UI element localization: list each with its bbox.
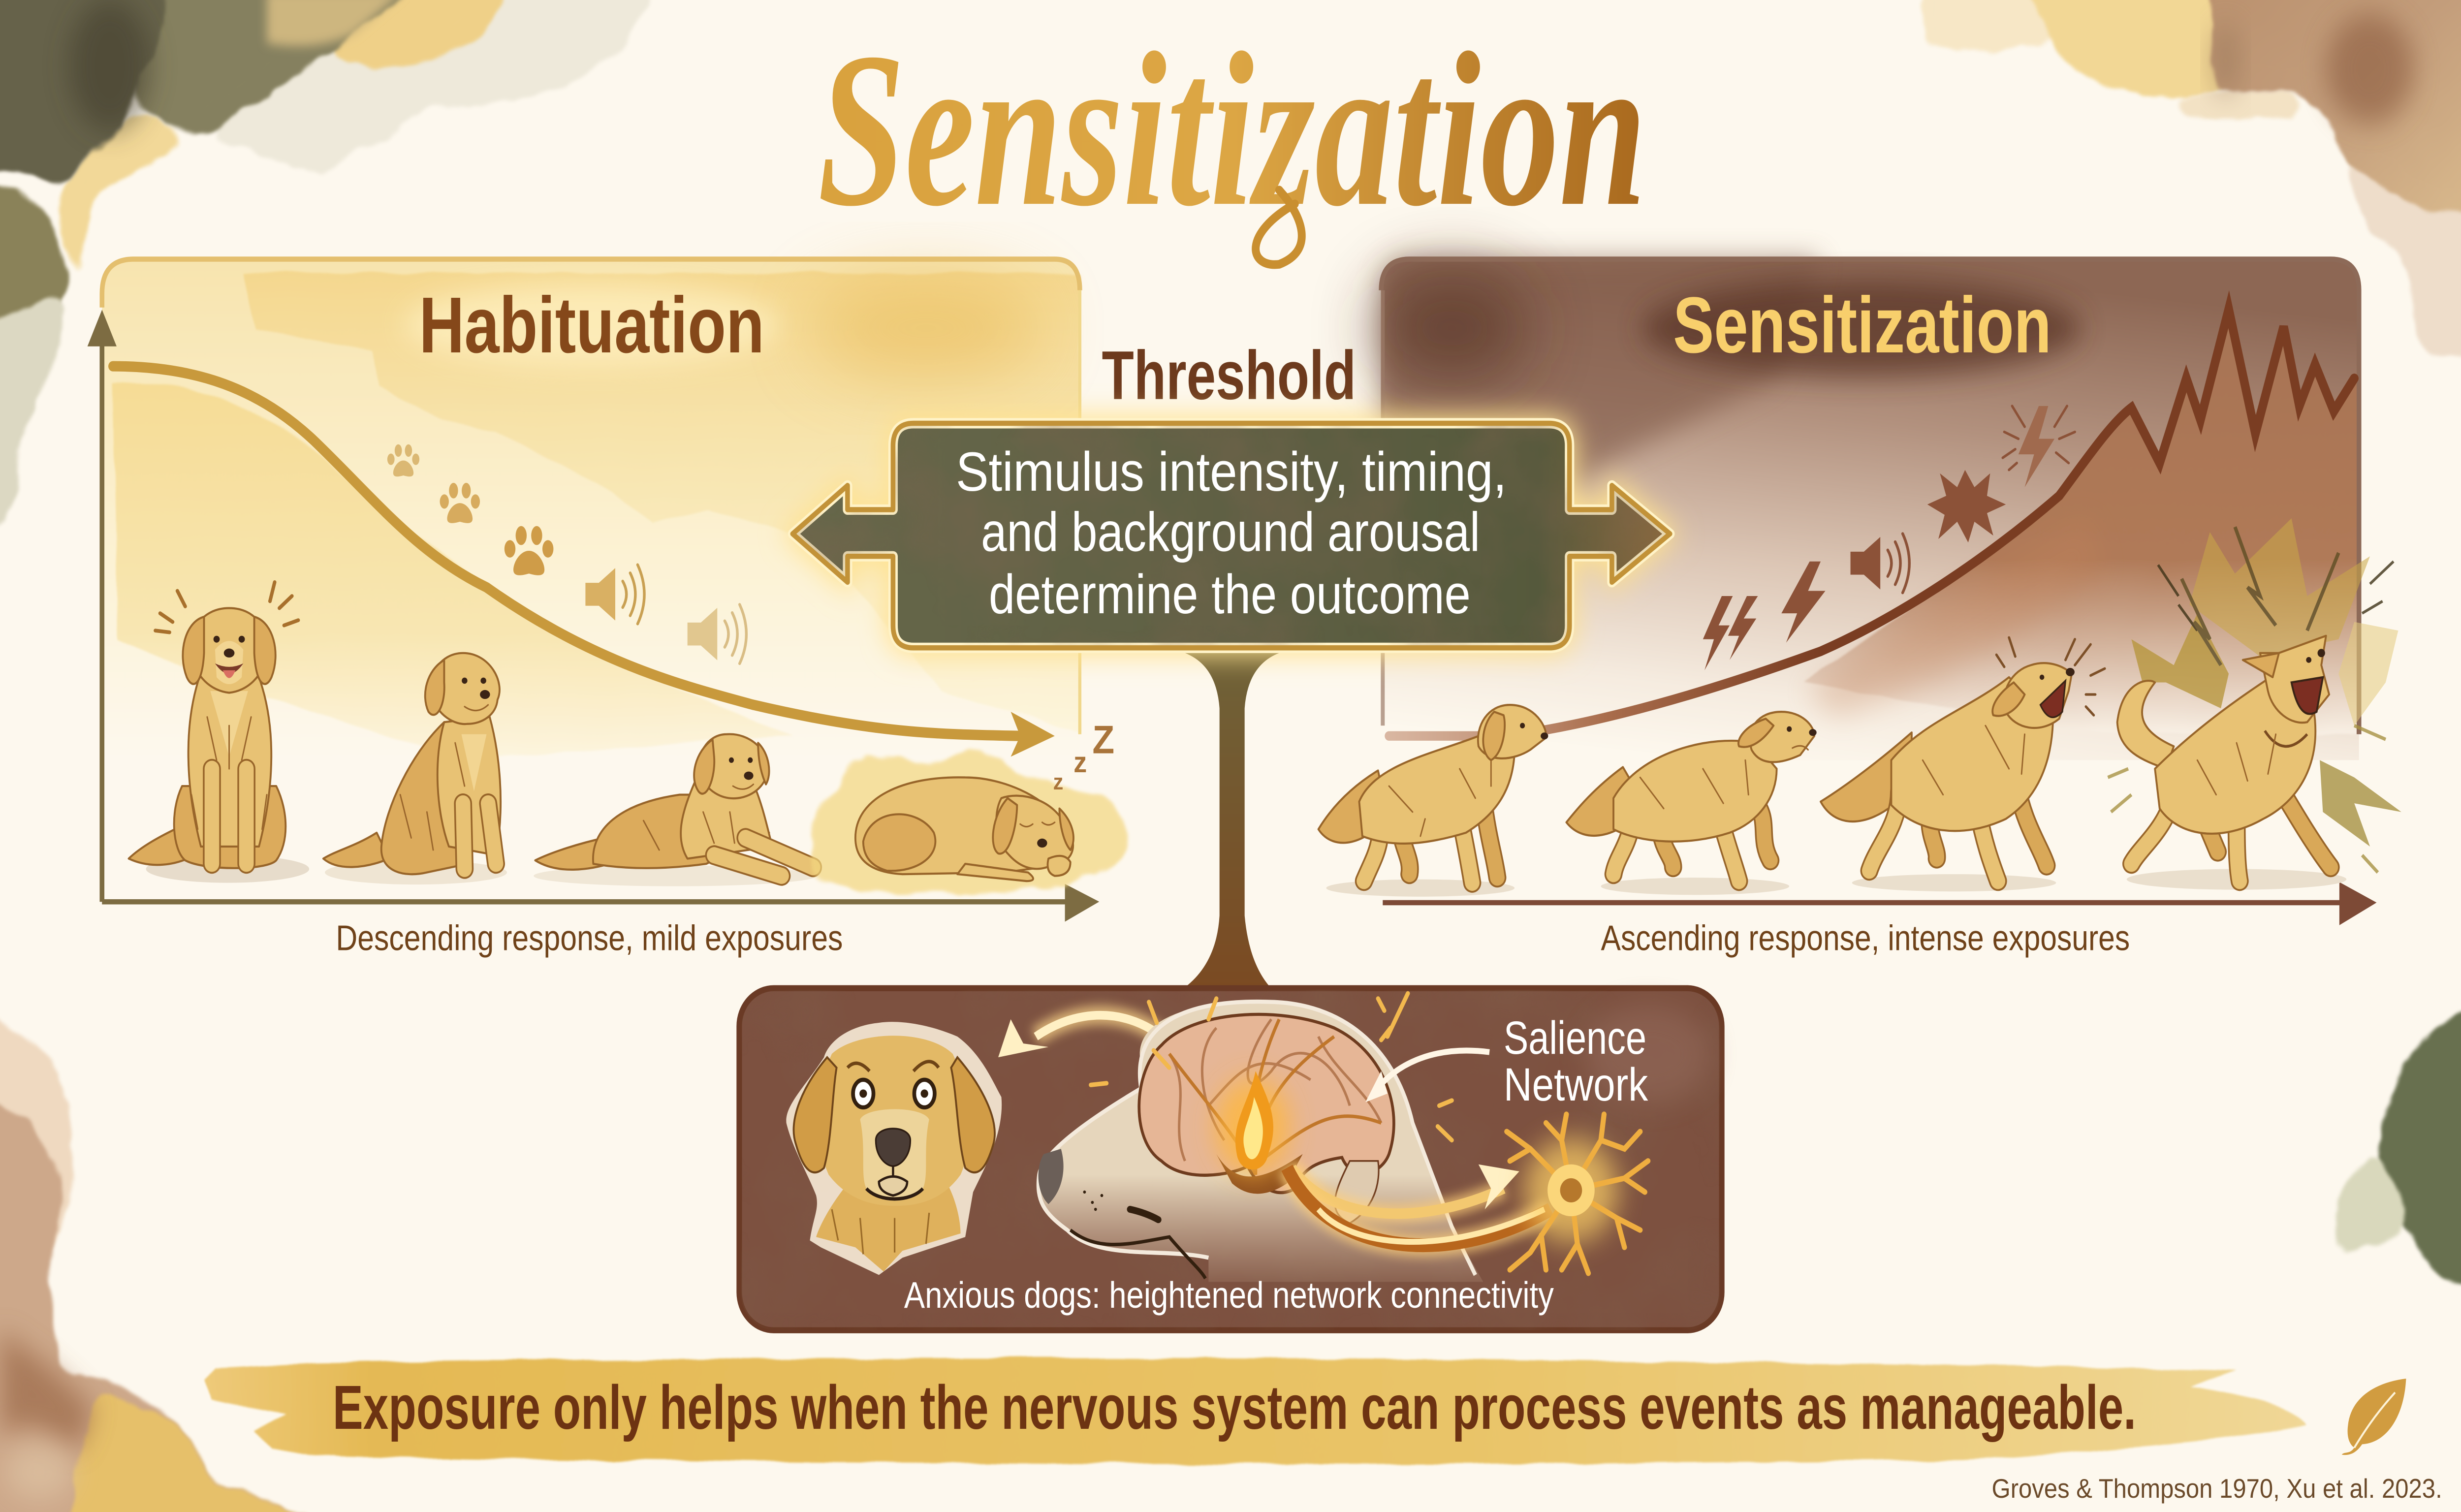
panel: salience network bbox=[739, 988, 1722, 1330]
sleep zzz: z bbox=[1073, 746, 1087, 779]
icon: paw medium bbox=[440, 483, 480, 523]
citation: Groves & Thompson 1970, Xu et al. 2023. bbox=[1992, 1474, 2442, 1504]
title: Sensitization bbox=[818, 7, 1646, 252]
caption: ascending: Ascending response, intense exposures bbox=[1601, 918, 2130, 958]
icon: double bolt bbox=[1703, 596, 1758, 670]
salience pointer bbox=[1365, 1051, 1489, 1102]
dog: asleep on yellow wash bbox=[809, 753, 1126, 893]
panel background wash bbox=[1373, 259, 2359, 760]
y axis bbox=[91, 316, 113, 902]
dog: sitting calmer bbox=[323, 653, 507, 884]
icon: starburst bbox=[1927, 470, 2006, 542]
ascending response curve bbox=[1389, 309, 2354, 736]
sleep zzz: z bbox=[1053, 770, 1063, 795]
heading: Threshold: Threshold bbox=[1102, 337, 1356, 414]
threshold box with arrows bbox=[792, 423, 1672, 648]
label: Salience Network: Salience bbox=[1504, 1012, 1646, 1064]
panel: sensitization bbox=[1319, 259, 2401, 958]
label: Salience Network bbox=[1504, 1012, 1648, 1111]
dog: alert sitting bbox=[128, 582, 309, 883]
dog: tense walking bbox=[1566, 712, 1817, 895]
icon: bolt bbox=[1781, 562, 1826, 643]
descending response curve bbox=[113, 366, 1055, 756]
caption: descending: Descending response, mild exposures bbox=[336, 918, 843, 958]
icon: speaker bbox=[585, 565, 644, 624]
threshold text bbox=[956, 441, 1507, 625]
sleep zzz bbox=[1053, 718, 1114, 795]
threshold text: determine the outcome bbox=[989, 564, 1471, 625]
icon: bolt with rays bbox=[2003, 406, 2075, 487]
amygdala flame bbox=[1215, 1071, 1290, 1175]
icon: paw large bbox=[505, 526, 553, 575]
arrow to face bbox=[998, 1015, 1198, 1083]
brown panel background bbox=[739, 988, 1722, 1330]
neuron bbox=[1507, 1114, 1648, 1273]
dog: lying down bbox=[534, 734, 816, 886]
caption: anxious dogs: Anxious dogs: heightened network connectivity bbox=[904, 1275, 1554, 1316]
icon: paw small bbox=[387, 444, 419, 476]
sleep zzz: Z bbox=[1092, 718, 1114, 762]
sparks bbox=[1091, 993, 1452, 1140]
threshold text: and background arousal bbox=[981, 501, 1480, 563]
connector stem bbox=[1179, 653, 1279, 992]
dog: snarling lunging bbox=[2117, 636, 2346, 890]
label: Salience Network: Network bbox=[1504, 1059, 1648, 1111]
dog head profile bbox=[1039, 1002, 1483, 1282]
panel background wash bbox=[102, 259, 1080, 760]
heading: Habituation: Habituation bbox=[419, 281, 764, 370]
x axis bbox=[102, 888, 1094, 917]
arrows to neuron bbox=[1287, 1165, 1551, 1245]
panel: habituation bbox=[91, 259, 1126, 958]
icon: loud speaker bbox=[1851, 534, 1909, 593]
dog: standing calm bbox=[1319, 705, 1548, 897]
threshold text: Stimulus intensity, timing, bbox=[956, 441, 1507, 503]
explosive burst around snarling dog bbox=[2108, 518, 2401, 873]
icon: faint speaker bbox=[688, 604, 746, 663]
x axis bbox=[1383, 886, 2371, 921]
brain bbox=[1139, 1014, 1394, 1223]
anxious dog face bbox=[786, 1022, 1002, 1275]
heading: Sensitization: Sensitization bbox=[1673, 281, 2051, 370]
dog: barking bbox=[1821, 637, 2105, 891]
takeaway banner bbox=[204, 1358, 2307, 1464]
icon: leaf bbox=[2342, 1379, 2406, 1455]
